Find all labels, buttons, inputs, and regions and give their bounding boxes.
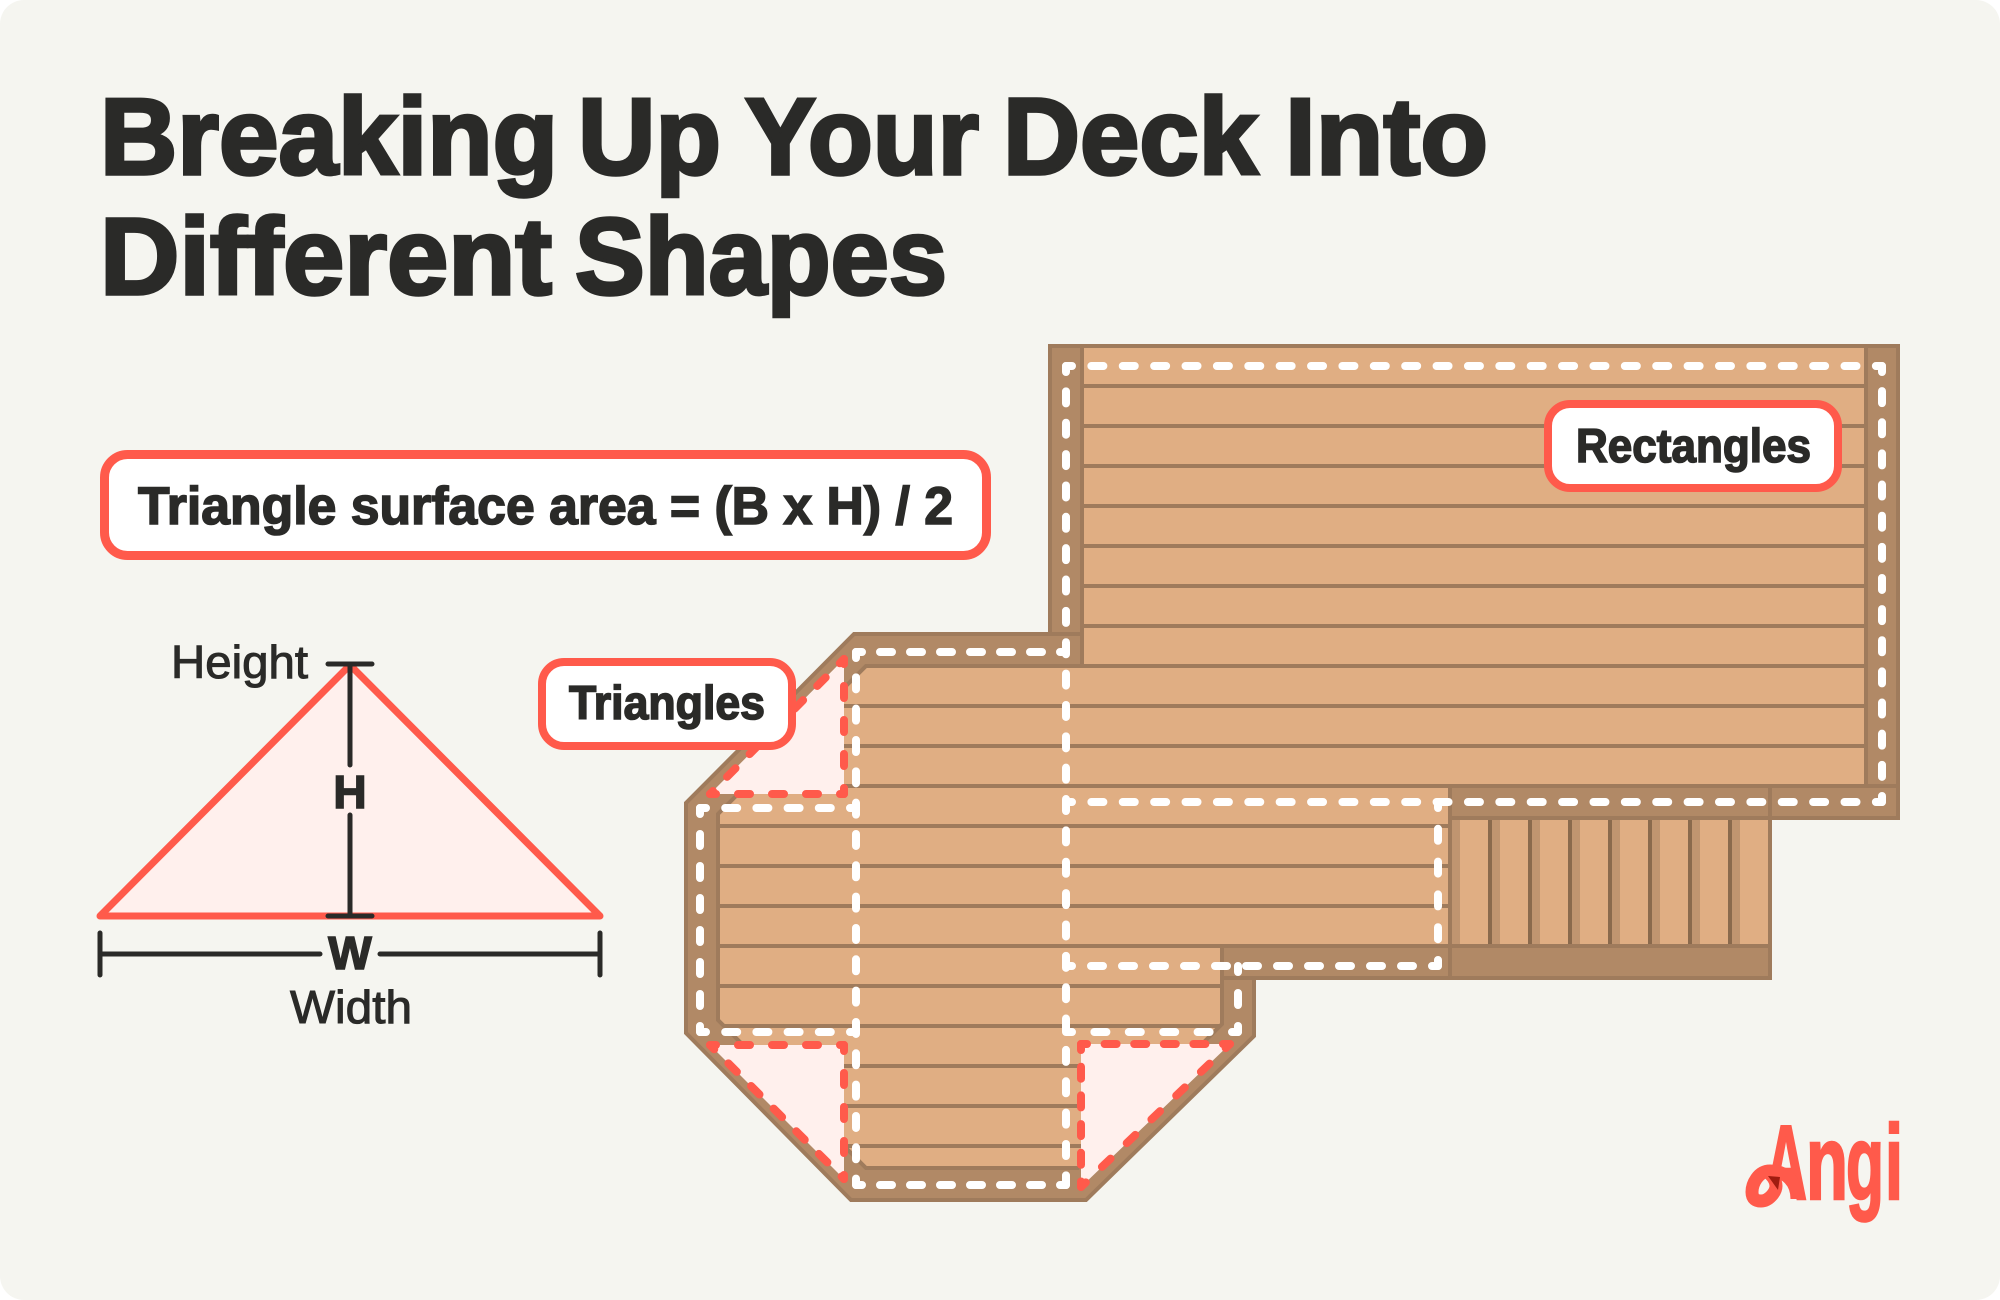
height dimension: Height [171, 636, 308, 688]
title: Shapes [575, 196, 947, 318]
title: Breaking [100, 76, 558, 198]
deck plan [542, 346, 1900, 1200]
rectangle dashed outlines [700, 366, 1882, 1185]
triangle shape [100, 665, 600, 916]
triangle bottom right [1081, 1044, 1230, 1187]
title: Deck [1003, 76, 1258, 198]
Angi logo: n [1806, 1104, 1848, 1222]
height dimension [171, 636, 372, 916]
deck frame [686, 346, 1898, 1200]
triangle top left [710, 659, 844, 794]
label: triangles [542, 662, 792, 746]
Angi logo: i [1885, 1104, 1903, 1222]
deck boards [680, 346, 1900, 1168]
stairs [1452, 820, 1768, 944]
title: Into [1285, 76, 1488, 198]
Angi logo: g [1846, 1104, 1884, 1222]
formula callout [104, 454, 986, 556]
triangle sections [710, 659, 1230, 1187]
Angi logo [1740, 1104, 1903, 1222]
label: rectangles [1548, 404, 1838, 488]
width dimension: W [328, 927, 372, 979]
title [100, 76, 1488, 318]
title: Different [100, 196, 552, 318]
Angi logo: A [1765, 1104, 1807, 1222]
title: Your [745, 76, 979, 198]
formula callout: Triangle surface area = (B x H) / 2 [138, 477, 953, 536]
width dimension: Width [290, 981, 412, 1033]
triangle bottom left [710, 1045, 844, 1179]
label: triangles: Triangles [569, 676, 765, 729]
height dimension: H [333, 766, 367, 818]
title: Up [578, 76, 721, 198]
triangle diagram [100, 636, 600, 1033]
label: rectangles: Rectangles [1576, 419, 1811, 472]
width dimension [100, 927, 600, 1033]
